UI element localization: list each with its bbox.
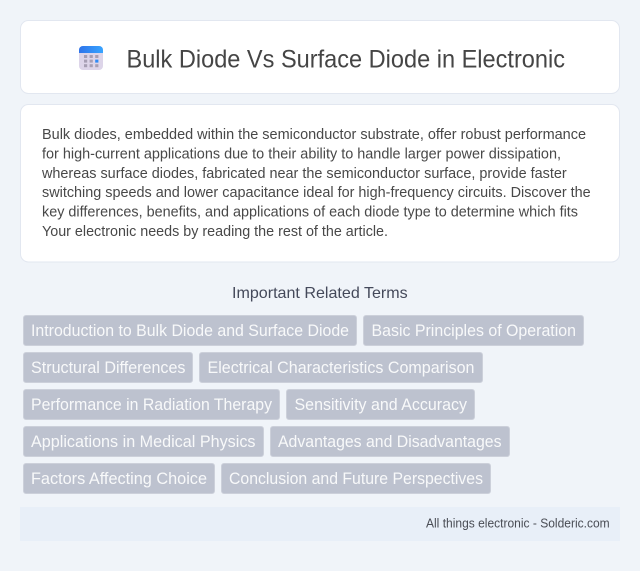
tag: basic principles	[364, 316, 584, 346]
text block: description: whereas surface diodes, fabricated near the semiconductor surface, provide faster	[41, 166, 567, 182]
heading: related terms: Important Related Terms	[232, 285, 408, 302]
tag: conclusion: Conclusion and Future Perspectives	[229, 470, 483, 488]
text block: description: for high-current applications due to their ability to handle larger power dissipation,	[42, 146, 561, 162]
tag: conclusion	[222, 464, 490, 494]
tag list	[24, 316, 584, 494]
footer	[20, 507, 620, 541]
text block: description: Bulk diodes, embedded within the semiconductor substrate, offer robust performance	[42, 127, 586, 143]
tag: radiation therapy: Performance in Radiation Therapy	[31, 396, 273, 414]
text block: description	[41, 127, 591, 240]
text block: description: Your electronic needs by reading the rest of the article.	[42, 224, 388, 240]
tag: electrical characteristics	[200, 352, 482, 382]
tag: structural differences	[24, 352, 192, 382]
tag: sensitivity: Sensitivity and Accuracy	[294, 396, 468, 414]
title: Bulk Diode Vs Surface Diode in Electronic	[126, 46, 565, 74]
tag: sensitivity	[286, 390, 474, 420]
tag: medical physics	[24, 426, 264, 456]
tag: medical physics: Applications in Medical Physics	[31, 433, 256, 451]
footer credit: All things electronic - Solderic.com	[426, 516, 610, 530]
tag: advantages	[270, 426, 510, 456]
tag: radiation therapy	[24, 390, 280, 420]
tag: advantages: Advantages and Disadvantages	[278, 433, 502, 451]
tag: basic principles: Basic Principles of Operation	[372, 322, 576, 340]
tag: introduction	[24, 316, 356, 346]
tag: introduction: Introduction to Bulk Diode and Surface Diode	[31, 322, 349, 340]
panel: header	[20, 20, 620, 94]
tag: structural differences: Structural Differences	[31, 359, 186, 377]
tag: electrical characteristics: Electrical Characteristics Comparison	[208, 359, 474, 377]
text block: description: switching speeds and lower capacitance ideal for high-frequency circuits. Discover the	[42, 185, 591, 201]
panel: description	[20, 104, 620, 262]
icon: calendar	[79, 46, 103, 70]
text block: description: key differences, benefits, and applications of each diode type to determine which fits	[42, 205, 578, 221]
tag: factors	[24, 464, 214, 494]
tag: factors: Factors Affecting Choice	[31, 470, 207, 488]
